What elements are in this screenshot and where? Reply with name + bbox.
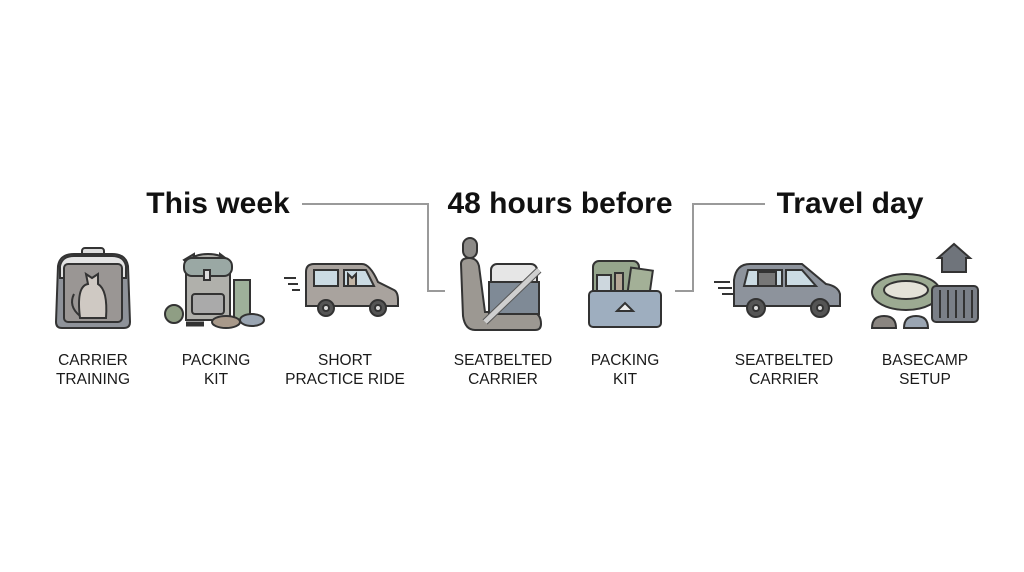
label: seatbelted carrier: CARRIER bbox=[468, 371, 538, 388]
heading: 48 hours before: 48 hours before bbox=[447, 187, 673, 220]
label: short practice ride: PRACTICE RIDE bbox=[285, 371, 405, 388]
label: seatbelted carrier 2 bbox=[735, 352, 833, 388]
label: seatbelted carrier bbox=[454, 352, 552, 388]
icon: basecamp setup bbox=[871, 242, 979, 329]
label: packing kit 2: KIT bbox=[613, 371, 637, 388]
label: short practice ride bbox=[285, 352, 405, 388]
label: seatbelted carrier 2: SEATBELTED bbox=[735, 352, 833, 369]
icon: backpack kit bbox=[164, 252, 265, 329]
label: basecamp setup bbox=[882, 352, 968, 388]
label: basecamp setup: SETUP bbox=[899, 371, 951, 388]
icon: packing kit bag bbox=[588, 260, 662, 328]
label: packing kit: KIT bbox=[204, 371, 228, 388]
icon: cat carrier bbox=[55, 247, 131, 329]
heading: This week: This week bbox=[146, 187, 290, 220]
label: carrier training bbox=[56, 352, 130, 388]
icon: seatbelted carrier seat bbox=[460, 237, 542, 331]
label: carrier training: TRAINING bbox=[56, 371, 130, 388]
label: packing kit bbox=[182, 352, 250, 388]
label: packing kit 2 bbox=[591, 352, 659, 388]
label: short practice ride: SHORT bbox=[318, 352, 372, 369]
heading: Travel day: Travel day bbox=[777, 187, 923, 220]
label: packing kit 2: PACKING bbox=[591, 352, 659, 369]
label: basecamp setup: BASECAMP bbox=[882, 352, 968, 369]
label: seatbelted carrier: SEATBELTED bbox=[454, 352, 552, 369]
label: seatbelted carrier 2: CARRIER bbox=[749, 371, 819, 388]
label: packing kit: PACKING bbox=[182, 352, 250, 369]
icon: car with carrier bbox=[714, 263, 841, 318]
label: carrier training: CARRIER bbox=[58, 352, 128, 369]
icon: van practice ride bbox=[284, 263, 399, 317]
